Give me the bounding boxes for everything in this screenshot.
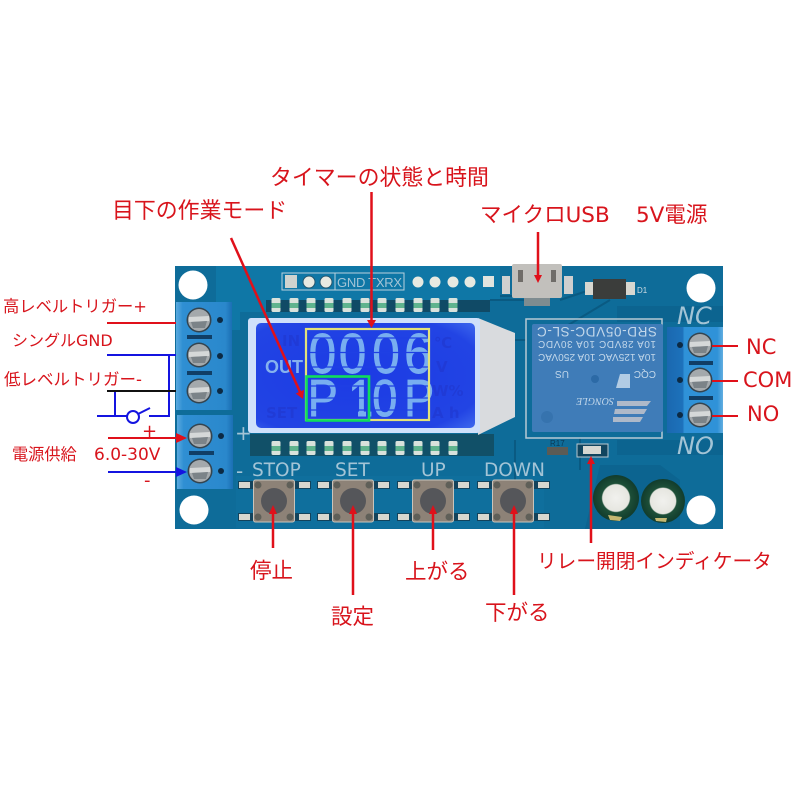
LCD faint unit labels: ℃ [434,334,452,352]
LCD faint unit labels: A h [432,404,460,422]
power supply label: 電源供給 [12,445,77,464]
label: current work mode: 目下の作業モード [112,199,287,224]
relay printed text: 10A 125VAC 10A 250VAC [538,351,656,362]
board silk labels: DOWN [484,460,545,481]
LCD light guide [478,318,515,435]
relay printed text [537,324,657,406]
arrow: stop button [269,505,277,548]
label: stop: 停止 [250,559,293,584]
output lines [712,346,738,416]
panel: circuit board [175,264,723,529]
label: timer state and time: タイマーの状態と時間 [270,166,489,191]
LCD faint unit labels [266,332,464,422]
label: COM: COM [743,368,792,392]
voltage label: 6.0-30V [94,445,161,465]
LCD bottom pins [250,434,494,456]
label: down: 下がる [485,601,550,626]
LCD faint unit labels: SET [266,404,298,422]
header pins and GND TX RX label [282,273,494,290]
LCD bottom digits: mode: P [404,370,434,428]
arrow: timer state [367,192,376,328]
LCD segment gaps [307,338,428,415]
relay printed text: SRD-05VDC-SL-C [537,324,657,339]
green highlight: work mode [306,376,369,420]
relay printed text: SONGLE [576,395,614,406]
board NC NO italic labels: NC [677,302,712,330]
diode D1 [585,279,648,299]
left power terminal block [177,415,233,489]
relay printed text: US [555,368,569,379]
label: NO: NO [747,402,779,426]
label: micro USB 5V power: 5V電源 [636,203,707,228]
LCD top pins [266,298,490,312]
LCD bottom digits: mode: 0 [372,370,397,428]
mounting holes [178,270,716,524]
arrow: set button [349,505,357,595]
LCD display [248,318,480,433]
arrow: micro USB [534,232,542,283]
arrow: power negative [108,467,187,477]
R17 and indicator LED [547,439,608,457]
LCD bottom digits: mode: 1 [348,370,373,428]
LCD faint unit labels: IN [282,332,300,350]
header pins and GND TX RX label: GND TXRX [337,275,402,290]
board silk labels: STOP [252,460,301,481]
arrow: power positive [108,433,187,443]
LCD bottom digits: mode: P [308,370,338,428]
wiring: trigger lines and switch [97,323,176,423]
tactile buttons [238,480,550,522]
board NC NO italic labels [677,302,714,460]
LCD top digits: time value: 0006 [309,323,431,386]
relay printed text: CQC [634,368,656,379]
board silk labels: - [236,459,243,483]
relay printed text: 10A 28VDC 10A 30VDC [538,338,656,349]
label: relay open close indicator: リレー開閉インディケータ [537,550,772,573]
label: micro USB 5V power: マイクロUSB [480,203,610,228]
yellow highlight: timer display [306,329,429,420]
arrow: up button [429,505,437,550]
board silk labels: + [235,421,252,445]
arrow: down button [510,505,518,595]
capacitors [593,475,685,523]
R17 and indicator LED: R17 [550,439,565,448]
LCD bottom digits: mode [308,370,434,428]
high trigger label: 高レベルトリガー+ [3,297,147,316]
board silk labels: UP [421,460,446,481]
right output terminal block [667,327,723,433]
arrow: relay LED [587,456,595,543]
label: up: 上がる [405,560,470,585]
board NC NO italic labels: NO [677,432,714,460]
micro USB connector [502,264,573,306]
diode D1: D1 [637,286,648,295]
signal GND label: シングルGND [12,331,113,350]
LCD faint unit labels: V [436,358,448,376]
low trigger label: 低レベルトリガー- [4,370,142,389]
board silk labels: SET [335,460,370,481]
arrow: work mode [231,238,304,399]
label: NC: NC [746,335,776,359]
minus sign: - [144,470,150,491]
LCD OUT label: OUT [265,357,303,377]
label: set: 設定 [331,605,374,630]
plus sign: + [142,421,157,442]
board silk labels [235,421,545,483]
LCD faint unit labels: W% [432,382,464,400]
left trigger terminal block [176,302,232,410]
relay [526,319,663,438]
